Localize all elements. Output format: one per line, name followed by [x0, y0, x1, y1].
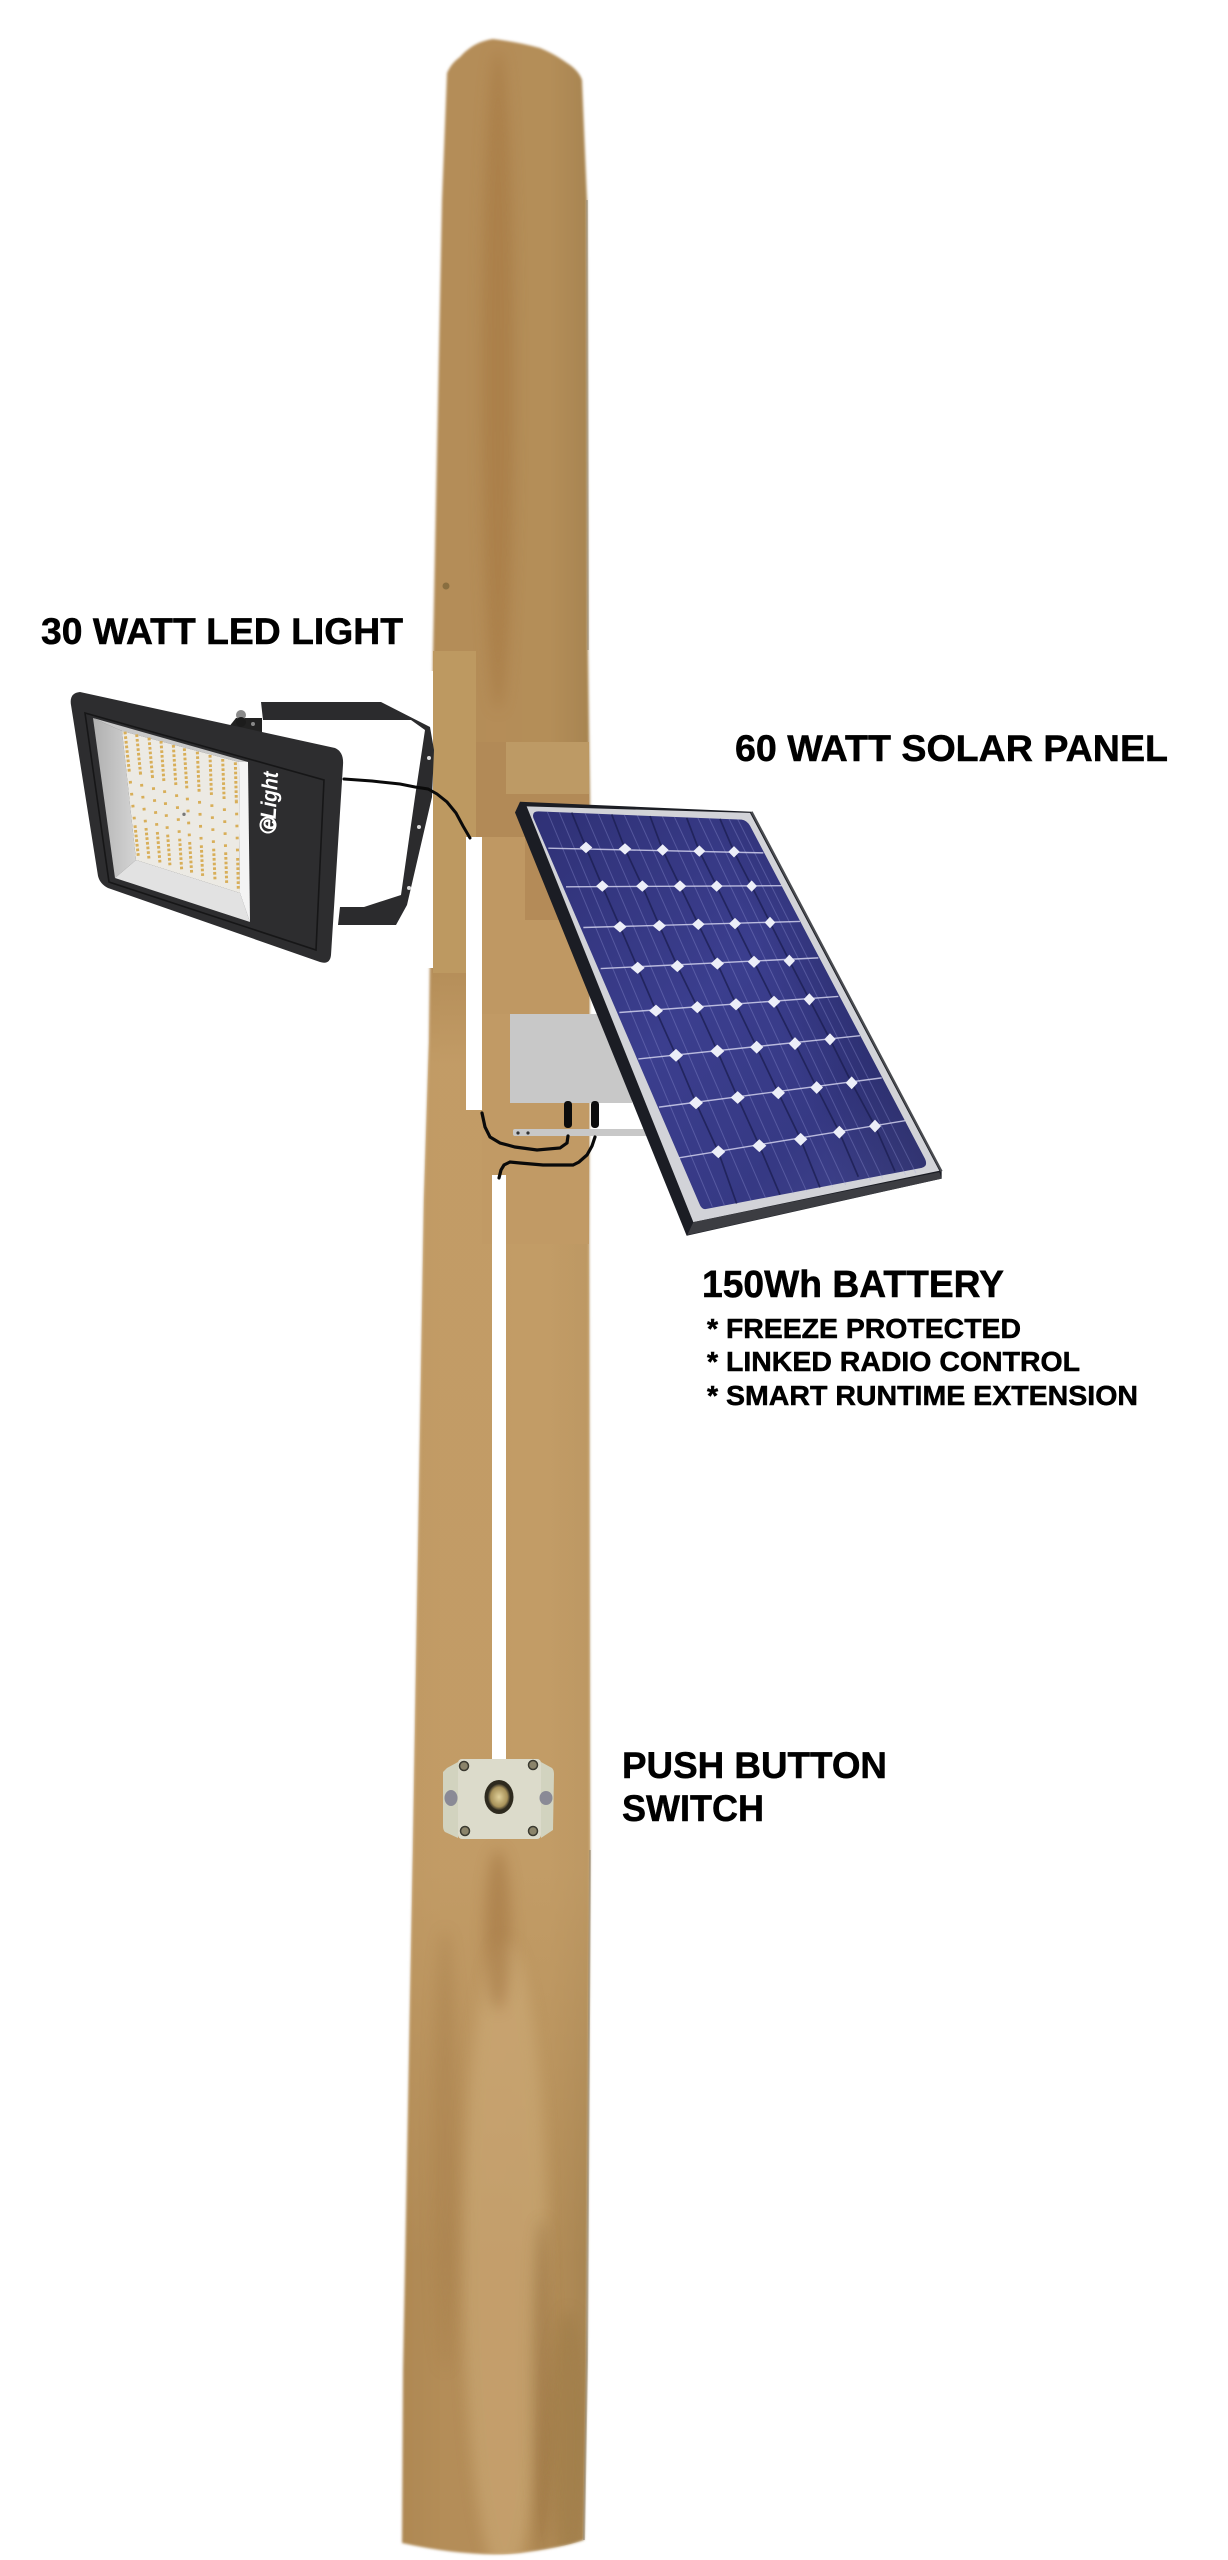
switch side wings [443, 1762, 458, 1838]
connector left [564, 1101, 572, 1128]
brand logo: eLight [255, 770, 283, 830]
wire from battery to switch conduit [499, 1137, 595, 1178]
side tabs [444, 1790, 552, 1806]
mounting bracket [261, 702, 434, 925]
light housing [71, 692, 343, 963]
wooden pole [400, 39, 595, 2560]
solar cell area [533, 811, 926, 1209]
connector right [591, 1101, 599, 1128]
cell grid lines [548, 848, 905, 1158]
battery feature list: * FREEZE PROTECTED [707, 1313, 1021, 1344]
label: push button switch [622, 1745, 887, 1829]
wire from light [344, 779, 470, 838]
wood mount patches [433, 651, 589, 1244]
push button switch [443, 1759, 554, 1839]
conduit channel to switch [492, 1175, 506, 1759]
mask left of the mount area [405, 671, 433, 968]
label: solar panel: 60 WATT SOLAR PANEL [735, 728, 1168, 769]
bracket holes [407, 756, 431, 890]
brass button [484, 1780, 514, 1814]
label: LED light: 30 WATT LED LIGHT [41, 611, 403, 652]
30 watt LED flood light [71, 692, 434, 963]
LED board [122, 731, 240, 893]
battery box [510, 1014, 632, 1103]
mounting bar [513, 1129, 649, 1136]
battery feature list: * LINKED RADIO CONTROL [707, 1346, 1080, 1377]
reflector walls [93, 718, 250, 922]
label: push button switch: SWITCH [622, 1788, 764, 1829]
battery feature list [707, 1313, 1138, 1411]
LED chips [125, 732, 238, 890]
switch body [458, 1759, 541, 1839]
label: push button switch: PUSH BUTTON [622, 1745, 887, 1786]
solar panel [515, 802, 942, 1236]
cell bus bars [547, 812, 916, 1207]
conduit channel to light [466, 837, 482, 1110]
battery feature list: * SMART RUNTIME EXTENSION [707, 1380, 1138, 1411]
adjustment knob [228, 710, 262, 736]
wire from battery to light conduit [482, 1113, 568, 1150]
panel frame [515, 802, 942, 1236]
cell corner diamonds [580, 842, 881, 1158]
label: battery: 150Wh BATTERY [702, 1264, 1004, 1306]
screws [460, 1760, 538, 1836]
